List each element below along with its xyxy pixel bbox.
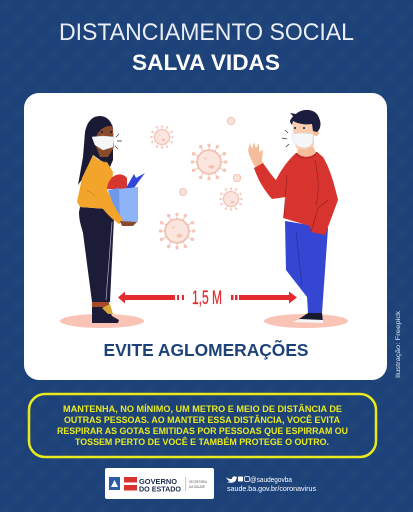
eyes: [101, 131, 112, 133]
footer logo: Governo do Estado: [105, 468, 214, 499]
shoe: [298, 313, 323, 322]
hair: [290, 110, 320, 132]
callout: yellow message box: OUTRAS PESSOAS. AO MANTER ESSA DISTÂNCIA, VOCÊ EVITA: [64, 414, 340, 426]
hand: [120, 221, 137, 226]
bag: [108, 187, 138, 223]
sweater with raised arm: [254, 152, 338, 235]
footer logo: Governo do Estado: GOVERNO: [139, 477, 177, 486]
illustration credit: Ilustração: Freepick: [396, 310, 402, 378]
panel: illustration card: [24, 93, 387, 380]
neck: [297, 146, 316, 157]
footer social handles: saude.ba.gov.br/coronavirus: [227, 484, 316, 493]
footer logo: Governo do Estado: DA SAÚDE: [189, 485, 206, 489]
callout: yellow message box: [29, 394, 376, 457]
distance arrow: 1,5 m: 1,5 M: [192, 288, 222, 309]
trousers: [285, 221, 328, 313]
footer logo: Governo do Estado: DO ESTADO: [139, 484, 181, 494]
hair fringe: [91, 123, 113, 137]
footer social handles: [226, 476, 316, 493]
bag contents: [107, 174, 127, 189]
raised hand: [248, 142, 263, 168]
ear: [313, 130, 319, 136]
sweater seams: [284, 152, 328, 232]
floor shadow: woman: [60, 314, 144, 328]
footer logo: Governo do Estado: SECRETARIA: [189, 480, 208, 484]
flag of Bahia: [109, 477, 137, 490]
callout: yellow message box: TOSSEM PERTO DE VOCÊ E TAMBÉM PROTEGE O OUTRO.: [75, 436, 329, 448]
ankle: [92, 302, 109, 307]
mask: [292, 133, 313, 148]
man waving: [248, 110, 338, 323]
sneeze marks: [282, 130, 289, 147]
callout: yellow message box: MANTENHA, NO MÍNIMO, UM METRO E MEIO DE DISTÂNCIA DE: [63, 403, 342, 415]
title: DISTANCIAMENTO SOCIAL: [59, 19, 354, 46]
heading: avoid crowds: EVITE AGLOMERAÇÕES: [104, 339, 309, 360]
floor shadow: man: [264, 314, 348, 328]
sneeze marks: [115, 134, 122, 149]
sweater seams: [87, 157, 106, 202]
eyes: [294, 127, 305, 129]
footer social handles: @saudegovba: [250, 477, 292, 484]
mask: [92, 136, 114, 150]
arm over bag: [92, 170, 123, 224]
boot: [92, 307, 119, 323]
title: SALVA VIDAS: [132, 50, 280, 75]
trousers: [79, 207, 114, 302]
hair: [78, 116, 113, 185]
callout: yellow message box: RESPIRAR AS GOTAS EMITIDAS POR PESSOAS QUE ESPIRRAM OU: [57, 426, 348, 437]
face: [292, 122, 314, 150]
virus particles: [151, 117, 242, 249]
distance arrow: 1,5 m: [118, 288, 297, 309]
title: [59, 19, 354, 75]
sweater: [77, 155, 123, 224]
face: [96, 123, 114, 157]
social icons: [226, 476, 250, 483]
woman with shopping bag: [77, 116, 145, 323]
